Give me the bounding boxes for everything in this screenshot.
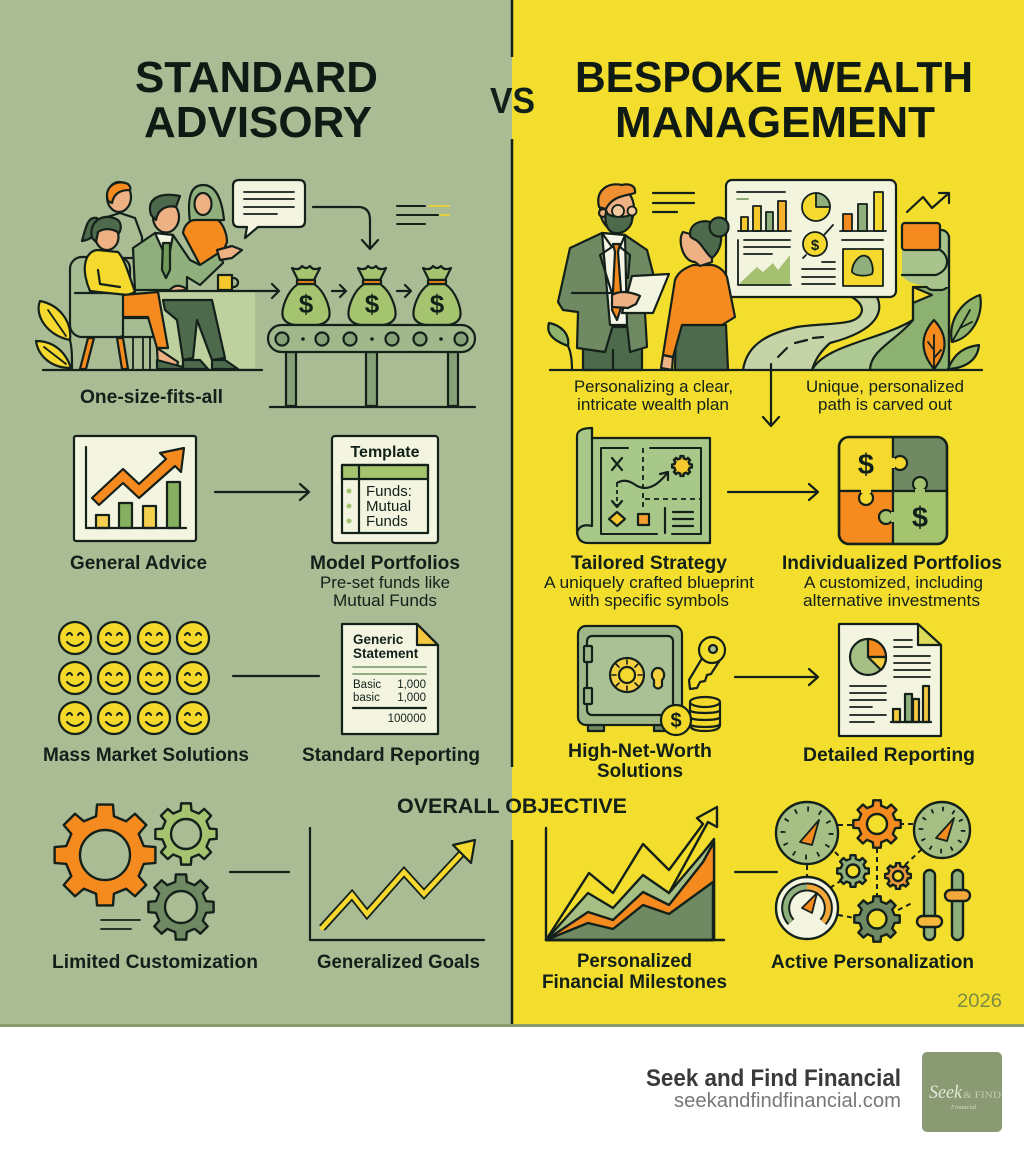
label: standard reporting: Standard Reporting	[302, 745, 480, 766]
label: personalized financial milestones: Personalized	[577, 951, 692, 972]
icon: portfolio template: Mutual	[366, 498, 411, 515]
label: one-size-fits-all: One-size-fits-all	[80, 387, 223, 408]
speech bubble	[233, 180, 305, 238]
table and trailing arrow	[160, 284, 279, 368]
dashboard board: $	[811, 237, 820, 254]
person: client in orange	[661, 218, 735, 370]
vs label: VS	[490, 80, 535, 121]
connector: gears to goals	[230, 871, 289, 873]
icon: smiley grid	[59, 622, 209, 734]
icon: money bags on conveyor: $	[430, 289, 445, 319]
label: personalized financial milestones: Financial Milestones	[542, 972, 727, 993]
label: unique personalized path: Unique, personalized	[806, 378, 964, 396]
ground line	[550, 369, 982, 371]
illustration: advisor group seated at table	[36, 182, 279, 370]
icon: dials, gears and sliders	[776, 800, 970, 942]
small motion lines	[397, 206, 449, 224]
connector: mass market to reporting	[233, 675, 319, 677]
arrow: safe to reporting	[735, 669, 818, 685]
person: back man	[107, 182, 142, 258]
icon: money bags on conveyor: $	[299, 289, 314, 319]
label: tailored strategy: Tailored Strategy	[571, 553, 727, 574]
icon: safe, key and coins: $	[670, 710, 682, 732]
title: standard advisory: ADVISORY	[144, 98, 372, 147]
arrow: strategy to portfolios	[728, 484, 818, 500]
label: model portfolios: Mutual Funds	[333, 592, 437, 610]
footer logo: Financial	[950, 1104, 976, 1111]
title: bespoke wealth management	[575, 53, 973, 147]
icon: detailed report	[839, 624, 941, 736]
icon: limited customization gears	[55, 803, 217, 940]
left panel background	[0, 0, 512, 1025]
label: mass market solutions: Mass Market Solutions	[43, 745, 249, 766]
winding road	[743, 295, 879, 370]
label: unique personalized path	[806, 378, 964, 414]
label: individualized portfolios: Individualized Portfolios	[782, 553, 1002, 574]
icon: portfolio template: Funds	[366, 513, 408, 530]
footer rule	[0, 1024, 1024, 1027]
icon: money bags on conveyor: $	[365, 289, 380, 319]
footer logo: Seek	[929, 1082, 963, 1103]
label: individualized portfolios: A customized, including	[804, 574, 983, 592]
label: high-net-worth solutions: Solutions	[597, 761, 683, 782]
person: woman in yellow	[82, 217, 183, 369]
centre divider	[511, 0, 513, 1024]
icon: portfolio template: Template	[350, 444, 420, 461]
label: individualized portfolios: alternative investments	[803, 592, 980, 610]
arrow: advice to portfolios	[215, 484, 309, 500]
label: high-net-worth solutions	[568, 741, 712, 782]
label: personalizing a clear, intricate wealth plan	[574, 378, 733, 414]
footer brand text	[646, 1065, 901, 1112]
label: limited customization: Limited Customization	[52, 952, 258, 973]
icon: generic statement: Statement	[353, 646, 419, 661]
icon: generic statement: Basic	[353, 679, 381, 691]
label: general advice: General Advice	[70, 553, 207, 574]
label: individualized portfolios	[782, 553, 1002, 610]
icon: leaves right	[924, 295, 981, 369]
connector: chart to dials	[735, 871, 777, 873]
footer brand text: Seek and Find Financial	[646, 1065, 901, 1092]
person: advisor with clipboard	[558, 184, 669, 370]
title: bespoke wealth management: BESPOKE WEALTH	[575, 53, 973, 102]
icon: trend arrow	[907, 193, 949, 212]
arrow: down to tailored strategy	[763, 364, 779, 426]
icon: puzzle portfolio: $	[858, 449, 874, 481]
label: model portfolios	[310, 553, 460, 610]
label: tailored strategy	[544, 553, 754, 610]
icon: coffee mug	[218, 275, 238, 290]
icon: generic statement	[342, 624, 438, 734]
label: tailored strategy: A uniquely crafted blueprint	[544, 574, 754, 592]
label: unique personalized path: path is carved out	[818, 396, 952, 414]
icon: money bags on conveyor	[268, 266, 475, 407]
person: man in suit	[133, 195, 242, 369]
icon: portfolio template: Funds:	[366, 483, 412, 500]
ground line	[43, 369, 262, 371]
title: standard advisory	[135, 53, 378, 147]
footer background	[0, 1027, 1024, 1154]
chart: generalized goals	[310, 828, 484, 940]
icon: generic statement: 1,000	[397, 679, 426, 691]
icon: puzzle portfolio	[839, 437, 947, 544]
icon: generic statement: 1,000	[397, 692, 426, 704]
label: tailored strategy: with specific symbols	[568, 592, 729, 610]
footer logo	[922, 1052, 1002, 1132]
chart: personalized milestones	[546, 807, 724, 940]
label: model portfolios: Pre-set funds like	[320, 574, 450, 592]
icon: puzzle portfolio: $	[912, 502, 928, 534]
icon: general advice chart	[74, 436, 196, 541]
icon: leaf left	[548, 323, 572, 370]
icon: yellow leaves	[36, 301, 72, 369]
year stamp: 2026	[957, 991, 1002, 1012]
right panel background	[512, 0, 1024, 1025]
footer brand text: seekandfindfinancial.com	[674, 1090, 901, 1112]
armchair	[70, 257, 179, 369]
label: personalizing a clear, intricate wealth plan: intricate wealth plan	[577, 396, 729, 414]
title: standard advisory: STANDARD	[135, 53, 378, 102]
label: model portfolios: Model Portfolios	[310, 553, 460, 574]
label: active personalization: Active Personalization	[771, 952, 974, 973]
heading: overall objective: OVERALL OBJECTIVE	[397, 795, 627, 818]
arrow: advice to money bags	[313, 207, 378, 249]
icon: generic statement: 100000	[388, 713, 426, 725]
title: bespoke wealth management: MANAGEMENT	[615, 98, 935, 147]
label: generalized goals: Generalized Goals	[317, 952, 480, 973]
label: high-net-worth solutions: High-Net-Worth	[568, 741, 712, 762]
icon: tailored strategy map	[577, 428, 710, 543]
label: detailed reporting: Detailed Reporting	[803, 745, 975, 766]
icon: safe, key and coins	[578, 626, 725, 735]
text lines beside advisor	[653, 193, 694, 212]
icon: generic statement: basic	[353, 692, 380, 704]
icon: portfolio template	[332, 436, 438, 543]
label: personalizing a clear, intricate wealth plan: Personalizing a clear,	[574, 378, 733, 396]
illustration: advisor and client with dashboard	[548, 180, 982, 370]
icon: generic statement: Generic	[353, 632, 404, 647]
label: personalized financial milestones	[542, 951, 727, 993]
dashboard board	[726, 180, 896, 297]
green hills and flag	[812, 223, 949, 370]
footer logo: & FIND	[963, 1090, 1002, 1100]
person: back woman	[183, 185, 227, 265]
